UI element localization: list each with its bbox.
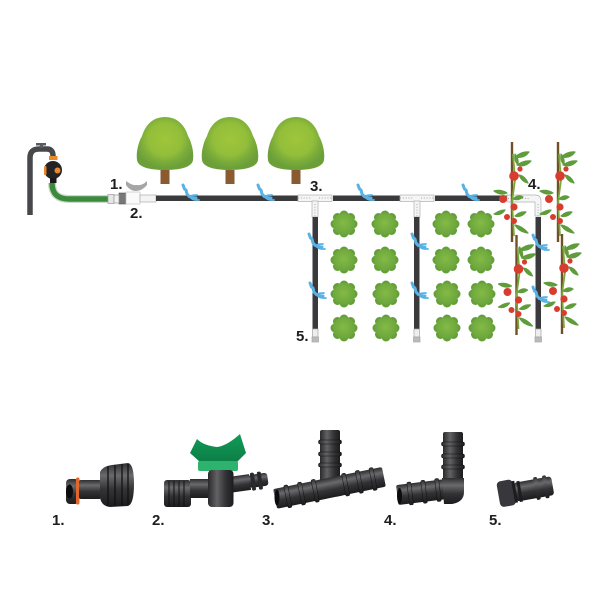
diagram labels: 2. <box>130 205 143 222</box>
product 3: tee connector <box>273 430 386 510</box>
product labels: 1. <box>52 512 65 529</box>
product labels: 5. <box>489 512 502 529</box>
hose <box>52 183 108 199</box>
product labels <box>52 512 502 529</box>
product labels: 3. <box>262 512 275 529</box>
main pipe <box>156 196 507 201</box>
diagram labels: 5. <box>296 328 309 345</box>
diagram labels: 4. <box>528 176 541 193</box>
product labels: 2. <box>152 512 165 529</box>
diagram labels: 1. <box>110 176 123 193</box>
product 4: elbow connector <box>396 432 464 506</box>
tomato plants <box>494 142 581 335</box>
branch pipes <box>312 217 541 329</box>
water drippers <box>183 185 549 302</box>
icon: timer <box>44 156 62 183</box>
cabbages <box>330 210 496 342</box>
diagram labels <box>110 176 541 345</box>
diagram labels: 3. <box>310 178 323 195</box>
product 2: valve <box>164 434 269 507</box>
end caps <box>312 329 542 342</box>
fittings: connector and valve outline <box>108 181 156 204</box>
product 5: end plug <box>496 472 555 507</box>
product labels: 4. <box>384 512 397 529</box>
product 1: tap connector <box>66 463 134 507</box>
trees <box>137 117 324 184</box>
icon: water tap <box>30 143 53 215</box>
tee and elbow fittings <box>298 195 541 217</box>
